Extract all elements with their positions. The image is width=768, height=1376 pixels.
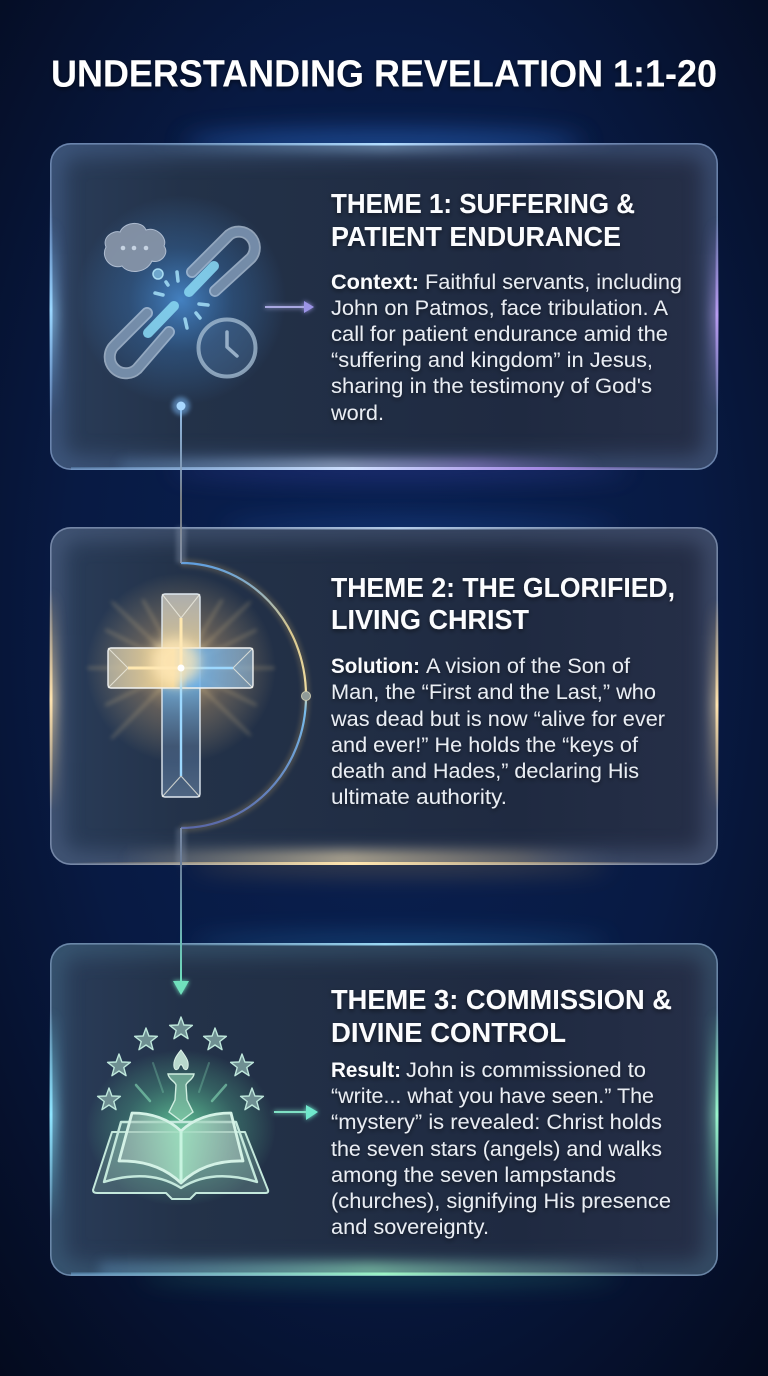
text: theme 1 context: Context: — [331, 271, 419, 294]
arrow: theme 1 to text — [265, 301, 314, 313]
icon: book, lampstand and seven stars — [86, 1017, 276, 1206]
text: theme 3 result: “write... what you have seen.” The — [331, 1085, 654, 1108]
icon: thought cloud — [104, 223, 166, 271]
icon: sparks at break — [155, 272, 208, 328]
heading: theme 2: THEME 2: THE GLORIFIED, — [331, 572, 675, 603]
text: theme 3 result: among the seven lampstands — [331, 1164, 616, 1187]
text: theme 3 result: (churches), signifying His presence — [331, 1190, 671, 1213]
heading: theme 2 — [331, 572, 675, 635]
icon: lower chain link — [110, 306, 174, 373]
text: theme 2 solution: was dead but is now “alive for ever — [330, 708, 665, 731]
heading: theme 1: PATIENT ENDURANCE — [331, 221, 621, 252]
heading: theme 3: DIVINE CONTROL — [331, 1017, 566, 1048]
heading: theme 3 — [331, 984, 672, 1048]
text: theme 3 result: and sovereignty. — [331, 1216, 489, 1239]
icon: small bubble — [153, 269, 163, 279]
icon: upper chain link — [189, 232, 255, 292]
icon: glowing cross — [86, 573, 276, 797]
text: theme 2 solution: A vision of the Son of — [426, 655, 630, 678]
text: theme 3 result: John is commissioned to — [406, 1059, 646, 1082]
text: theme 1 context: “suffering and kingdom” in Jesus, — [331, 349, 653, 372]
text: theme 2 solution — [330, 655, 665, 809]
text: theme 3 result: Result: — [331, 1059, 401, 1082]
title: UNDERSTANDING REVELATION 1:1-20 — [51, 54, 717, 96]
panel: theme 2 the glorified living Christ — [44, 519, 724, 873]
heading: theme 3: THEME 3: COMMISSION & — [331, 984, 672, 1015]
panel: theme 1 suffering and patient endurance — [44, 129, 724, 478]
text: theme 3 result: the seven stars (angels) and walks — [331, 1138, 662, 1161]
icon: light rays — [136, 1063, 226, 1101]
connector: theme 1 to theme 2 with start dot — [172, 397, 190, 563]
text: theme 3 result: “mystery” is revealed: Christ holds — [331, 1111, 662, 1134]
heading: theme 2: LIVING CHRIST — [331, 604, 529, 635]
text: theme 1 context: Faithful servants, including — [425, 271, 682, 294]
arc: halo around cross — [181, 563, 310, 828]
heading: theme 1 — [331, 188, 635, 252]
text: theme 1 context: call for patient endurance amid the — [331, 323, 668, 346]
heading: theme 1: THEME 1: SUFFERING & — [331, 188, 635, 219]
text: theme 2 solution: death and Hades,” declaring His — [331, 760, 639, 783]
text: theme 2 solution: and ever!” He holds the “keys of — [331, 734, 638, 757]
icon: seven stars — [98, 1017, 263, 1110]
icon: open book — [93, 1113, 268, 1199]
text: theme 3 result — [331, 1059, 671, 1239]
text: theme 1 context: word. — [330, 402, 384, 425]
text: theme 1 context: sharing in the testimony of God's — [331, 375, 652, 398]
icon: broken chain with cloud and clock — [76, 195, 286, 405]
text: theme 1 context — [330, 271, 682, 425]
icon: lampstand — [168, 1074, 194, 1121]
icon: clock — [198, 320, 256, 376]
arrow: connector from theme 2 to theme 3 — [173, 828, 189, 995]
text: theme 1 context: John on Patmos, face tribulation. A — [331, 297, 668, 320]
icon: lampstand flame — [174, 1050, 188, 1070]
text: theme 2 solution: Man, the “First and the Last,” who — [331, 681, 656, 704]
text: theme 2 solution: Solution: — [331, 655, 420, 678]
arrow: theme 3 to text — [274, 1105, 318, 1120]
panel: theme 3 commission and divine control — [44, 935, 724, 1284]
text: theme 2 solution: ultimate authority. — [331, 786, 507, 809]
